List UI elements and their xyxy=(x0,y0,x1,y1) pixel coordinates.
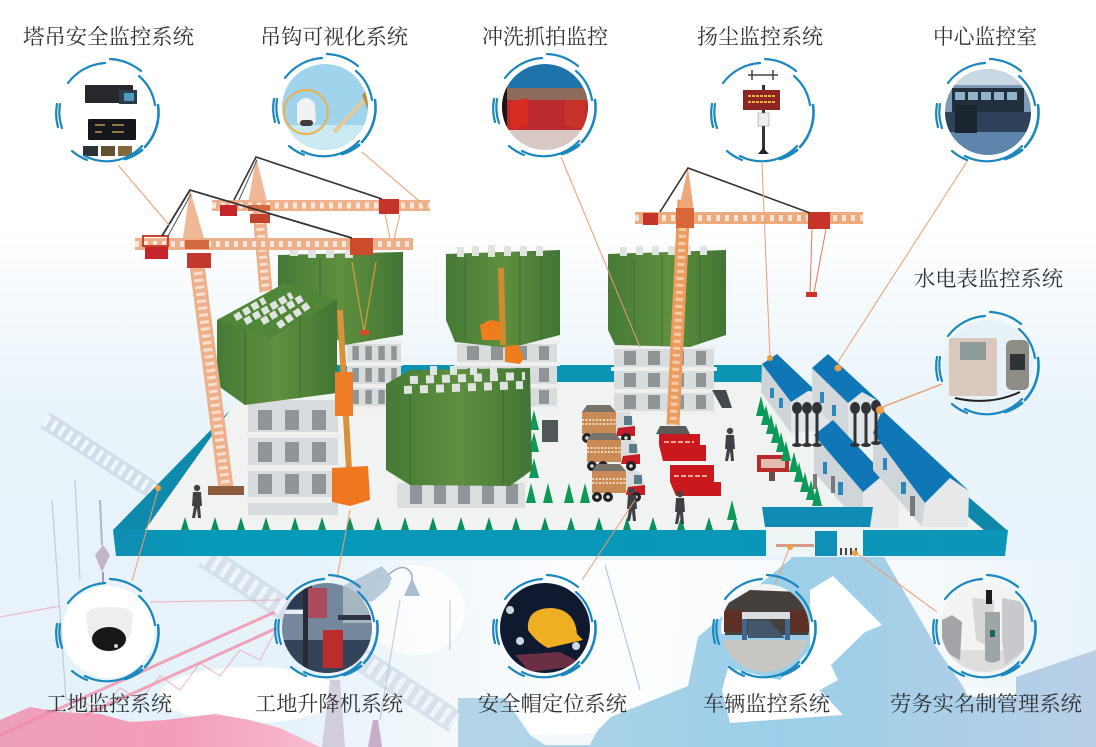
building: back centre xyxy=(446,245,560,410)
heading: 工地升降机系统 xyxy=(255,692,403,716)
tower crane 3 (right) xyxy=(635,168,863,434)
hoist lift on front left building xyxy=(332,310,370,506)
callout leader lines xyxy=(118,152,968,612)
heading: 塔吊安全监控系统 xyxy=(23,25,194,49)
heading: 车辆监控系统 xyxy=(703,692,830,716)
red material barriers xyxy=(659,434,721,496)
front edge trees xyxy=(181,410,739,530)
roadside tree row xyxy=(756,396,822,506)
icon: gate photo xyxy=(720,584,810,672)
prefab houses xyxy=(761,354,969,528)
heading: 中心监控室 xyxy=(933,25,1037,49)
icon: hoist photo xyxy=(282,583,373,673)
callout: hook visualisation xyxy=(260,25,408,156)
tower crane 2 (back) xyxy=(212,157,430,292)
entrance gate xyxy=(762,507,873,556)
heading: 安全帽定位系统 xyxy=(478,692,627,716)
callout: vehicle monitoring xyxy=(703,575,830,716)
heading: 水电表监控系统 xyxy=(914,267,1063,291)
icon: wash bay photo xyxy=(502,64,588,150)
icon: meter boxes xyxy=(943,320,1033,410)
heading: 劳务实名制管理系统 xyxy=(890,692,1082,716)
pipe stacks xyxy=(542,390,732,442)
construction site platform xyxy=(113,365,1008,556)
icon: dust monitor pole xyxy=(743,70,780,154)
floor xyxy=(145,382,985,530)
icon: turnstile gates xyxy=(940,583,1030,675)
callout: water and electricity meters xyxy=(914,267,1063,414)
site notice board xyxy=(757,455,789,481)
callout: tower crane safety monitoring xyxy=(23,25,194,161)
callout: central control room xyxy=(933,25,1039,161)
callout: helmet positioning xyxy=(478,575,627,716)
street lamps xyxy=(792,400,881,447)
building: back left xyxy=(278,248,403,410)
icon: dome camera xyxy=(62,586,154,678)
trucks xyxy=(582,405,645,502)
background collage: crane silhouettes and hills xyxy=(0,420,1096,747)
building: front centre xyxy=(386,366,532,508)
icon: yellow helmet xyxy=(500,583,590,673)
icon: dome camera on sky xyxy=(282,64,368,150)
heading: 扬尘监控系统 xyxy=(697,25,823,49)
front wall xyxy=(113,530,1008,556)
heading: 工地监控系统 xyxy=(46,692,172,716)
back wall xyxy=(238,365,768,383)
left wall xyxy=(113,397,250,530)
tower crane 1 (front) xyxy=(135,190,413,495)
heading: 吊钩可视化系统 xyxy=(260,25,408,49)
heading: 冲洗抓拍监控 xyxy=(482,25,608,49)
building: front left xyxy=(217,283,340,515)
building: back right xyxy=(608,246,726,415)
workers xyxy=(192,428,735,524)
callout: site hoist xyxy=(255,575,403,716)
icon: control boxes xyxy=(83,85,137,156)
callout: site monitoring xyxy=(46,579,172,716)
right wall xyxy=(945,488,1008,531)
icon: control room photo xyxy=(945,69,1031,155)
callout: real-name labour management xyxy=(890,575,1082,716)
callout: wash capture xyxy=(482,25,608,156)
callout: dust monitoring xyxy=(697,25,823,161)
